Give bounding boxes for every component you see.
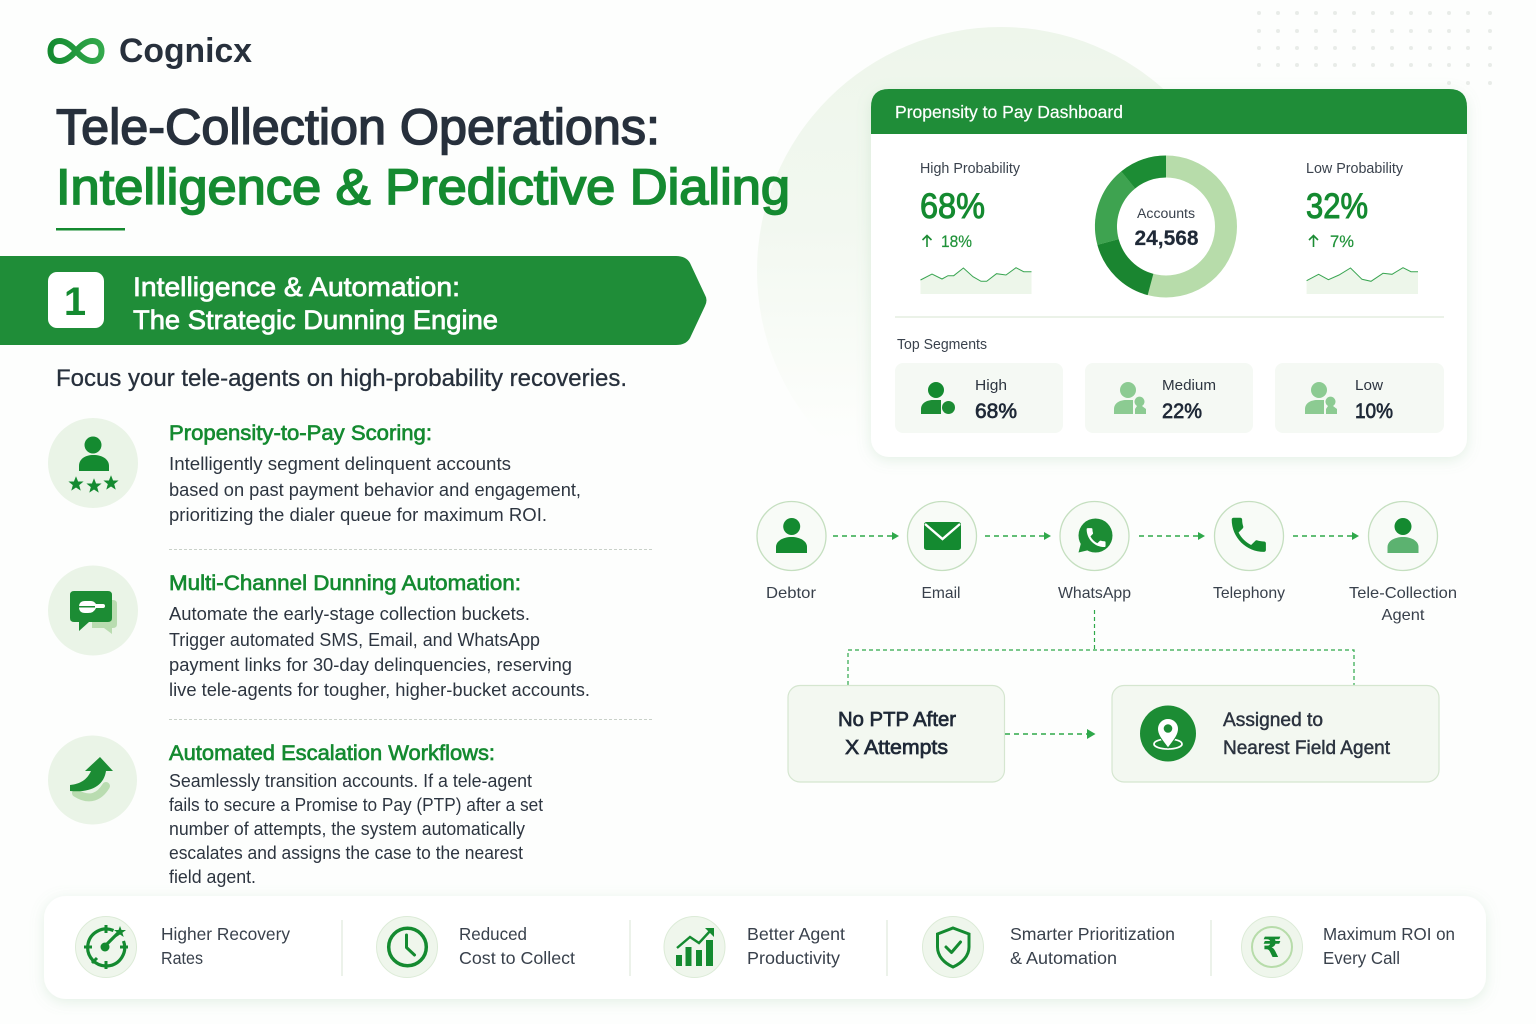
benefit: reduced cost to collect: Reduced — [459, 924, 527, 944]
section heading: The Strategic Dunning Engine — [133, 305, 498, 335]
body text: number of attempts, the system automatically — [169, 819, 525, 839]
section heading: Intelligence & Automation: — [133, 272, 460, 302]
logo — [50, 32, 252, 70]
benefit: reduced cost to collect: Cost to Collect — [459, 948, 575, 968]
body text: prioritizing the dialer queue for maximum ROI. — [169, 505, 547, 525]
body text — [169, 604, 590, 700]
benefit: reduced cost to collect — [376, 916, 575, 978]
title: Tele-Collection Operations: — [56, 99, 660, 155]
segment: high: 68% — [975, 400, 1017, 423]
segment: high: High — [975, 377, 1007, 394]
low probability stat: 32% — [1306, 187, 1368, 226]
segment: low — [1275, 363, 1444, 433]
icon: escalation arrow — [48, 736, 137, 824]
arrow — [833, 532, 899, 540]
icon: location pin — [1140, 706, 1196, 762]
title — [56, 99, 790, 215]
channel flow — [757, 502, 1457, 624]
icon: shield check — [922, 916, 984, 978]
panel: benefits bar — [44, 896, 1486, 999]
benefit: better agent productivity: Better Agent — [747, 924, 845, 944]
benefit: higher recovery rates: Rates — [161, 948, 203, 968]
benefit: smarter prioritization: Smarter Prioritization — [1010, 924, 1175, 944]
feature: multi-channel dunning automation — [48, 566, 590, 700]
benefit: maximum roi — [1242, 916, 1455, 978]
icon: person with stars — [48, 418, 138, 508]
step: email — [908, 502, 976, 602]
icon: target — [76, 916, 136, 978]
section number badge: 1 — [64, 280, 86, 324]
step: tele-collection agent — [1349, 502, 1457, 624]
icon: clock — [376, 916, 438, 978]
high probability stat: 18% — [941, 232, 972, 251]
feature: automated escalation workflows — [48, 736, 543, 887]
arrow — [1139, 532, 1205, 540]
high probability stat — [920, 161, 1032, 294]
body text: field agent. — [169, 867, 256, 887]
box: no ptp after x attempts — [788, 686, 1004, 782]
arrow — [1293, 532, 1359, 540]
benefit: higher recovery rates — [76, 916, 290, 978]
body text: escalates and assigns the case to the nearest — [169, 843, 523, 863]
low probability stat: Low Probability — [1306, 161, 1404, 177]
low probability stat — [1306, 161, 1418, 294]
step: telephony: Telephony — [1213, 585, 1285, 602]
donut center label: 24,568 — [1134, 227, 1199, 250]
icon: infinity mark — [50, 41, 102, 61]
feature: propensity-to-pay scoring — [48, 418, 581, 525]
step: debtor — [757, 502, 826, 602]
body text: Automate the early-stage collection buckets. — [169, 604, 530, 624]
body text — [169, 771, 543, 887]
background circle — [757, 27, 1245, 515]
body text: payment links for 30-day delinquencies, reserving — [169, 655, 572, 675]
section number badge — [48, 272, 104, 328]
benefit: maximum roi: Every Call — [1323, 948, 1400, 968]
box: assigned to nearest field agent — [1112, 686, 1439, 782]
step: whatsapp: WhatsApp — [1058, 585, 1131, 602]
box: no ptp after x attempts: No PTP After — [838, 709, 956, 731]
sparkline — [1307, 268, 1418, 294]
box: assigned to nearest field agent: Nearest Field Agent — [1223, 738, 1391, 759]
body text: live tele-agents for tougher, higher-bucket accounts. — [169, 680, 590, 700]
brand name: Cognicx — [119, 32, 252, 70]
benefit: better agent productivity — [664, 916, 845, 978]
high probability stat: High Probability — [920, 161, 1021, 177]
step: tele-collection agent: Tele-Collection — [1349, 585, 1457, 602]
step: email: Email — [922, 585, 960, 602]
benefit: maximum roi: Maximum ROI on — [1323, 924, 1455, 944]
icon: rupee coin — [1242, 916, 1302, 978]
body text: Seamlessly transition accounts. If a tele-agent — [169, 771, 532, 791]
step: debtor: Debtor — [766, 585, 817, 602]
step: tele-collection agent: Agent — [1382, 607, 1425, 624]
box: no ptp after x attempts: X Attempts — [845, 737, 948, 759]
segment: high — [895, 363, 1063, 433]
donut center label: Accounts — [1137, 206, 1195, 221]
dashboard header: Propensity to Pay Dashboard — [895, 102, 1123, 122]
donut chart — [1106, 166, 1226, 286]
section heading — [133, 272, 498, 335]
benefit: smarter prioritization — [922, 916, 1175, 978]
segment: low: Low — [1355, 377, 1383, 394]
arrow — [1005, 729, 1096, 739]
panel: propensity to pay dashboard — [871, 89, 1467, 457]
section subtitle: Focus your tele-agents on high-probability recoveries. — [56, 365, 627, 392]
section banner — [0, 256, 706, 345]
heading: Multi-Channel Dunning Automation: — [169, 572, 521, 595]
escalation branch connector — [848, 610, 1354, 685]
segment: medium — [1085, 363, 1253, 433]
box: assigned to nearest field agent: Assigned to — [1223, 710, 1323, 731]
segment: low: 10% — [1355, 400, 1393, 423]
step: whatsapp — [1058, 502, 1131, 602]
heading: Propensity-to-Pay Scoring: — [169, 422, 432, 445]
sparkline — [920, 268, 1032, 294]
body text: Intelligently segment delinquent accounts — [169, 454, 511, 474]
step: telephony — [1213, 502, 1285, 602]
top segments label: Top Segments — [897, 337, 987, 353]
body text: Trigger automated SMS, Email, and WhatsApp — [169, 630, 540, 650]
segment: medium: Medium — [1162, 377, 1216, 394]
icon: chat bubbles — [48, 566, 138, 656]
dot pattern — [1257, 11, 1492, 85]
low probability stat: 7% — [1330, 232, 1354, 251]
title underline — [56, 228, 125, 230]
high probability stat: 68% — [920, 187, 985, 226]
segment: medium: 22% — [1162, 400, 1202, 423]
arrow — [985, 532, 1051, 540]
body text: fails to secure a Promise to Pay (PTP) after a set — [169, 795, 543, 815]
donut center label — [1134, 206, 1199, 250]
benefit: smarter prioritization: & Automation — [1010, 948, 1117, 968]
heading: Automated Escalation Workflows: — [169, 742, 495, 765]
icon: rupee coin: ₹ — [1262, 931, 1282, 964]
icon: bar chart with trend arrow — [664, 916, 725, 978]
body text: based on past payment behavior and engagement, — [169, 480, 581, 500]
benefit: better agent productivity: Productivity — [747, 948, 840, 968]
body text — [169, 454, 581, 525]
dashboard header — [871, 89, 1467, 134]
title: Intelligence & Predictive Dialing — [56, 159, 790, 215]
benefit: higher recovery rates: Higher Recovery — [161, 924, 290, 944]
